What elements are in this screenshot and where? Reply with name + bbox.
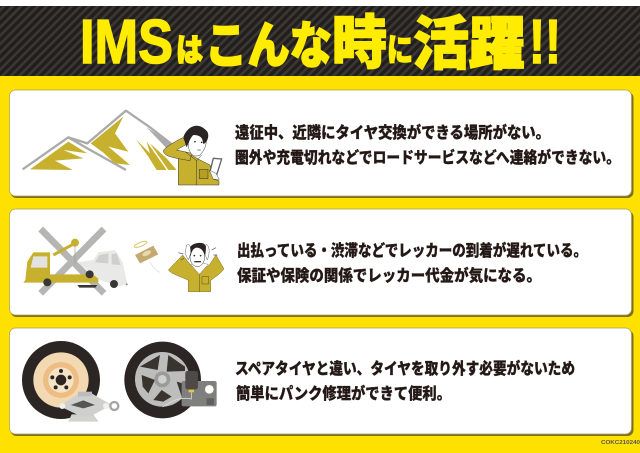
title banner bbox=[0, 6, 640, 77]
icon: mountains bbox=[23, 111, 177, 170]
panel: convenient repair bbox=[10, 328, 634, 436]
title text: 活躍 bbox=[413, 12, 525, 77]
title text: IMS bbox=[80, 8, 173, 77]
text: panel 2 bbox=[237, 241, 587, 285]
title text bbox=[80, 8, 561, 77]
panel: no place to change tyres bbox=[10, 90, 634, 198]
icon: man with phone bbox=[163, 126, 222, 185]
icon: spare tyre bbox=[22, 341, 100, 419]
icon: worried man bbox=[168, 243, 224, 292]
text: panel 3: スペアタイヤと違い、タイヤを取り外す必要がないため bbox=[235, 359, 575, 378]
document code: COKC210240 bbox=[601, 440, 640, 446]
text: panel 1: 遠征中、近隣にタイヤ交換ができる場所がない。 bbox=[235, 123, 550, 142]
icon: wheel with repair compressor bbox=[124, 342, 217, 418]
text: panel 2: 出払っている・渋滞などでレッカーの到着が遅れている。 bbox=[237, 241, 587, 260]
text: panel 2: 保証や保険の関係でレッカー代金が気になる。 bbox=[237, 266, 541, 285]
icon: flying money bbox=[134, 240, 160, 272]
panel: waiting for tow truck bbox=[10, 209, 634, 317]
title text: こんな bbox=[205, 18, 332, 74]
text: panel 1 bbox=[235, 123, 620, 167]
icon: crossed out tow truck bbox=[23, 229, 128, 293]
title text: は bbox=[176, 32, 203, 68]
text: panel 3 bbox=[235, 359, 575, 403]
title text: に bbox=[387, 32, 413, 68]
title text: !! bbox=[529, 8, 561, 77]
title text: 時 bbox=[332, 11, 387, 76]
icon: car jack bbox=[59, 392, 118, 422]
text: panel 3: 簡単にパンク修理ができて便利。 bbox=[236, 384, 451, 403]
